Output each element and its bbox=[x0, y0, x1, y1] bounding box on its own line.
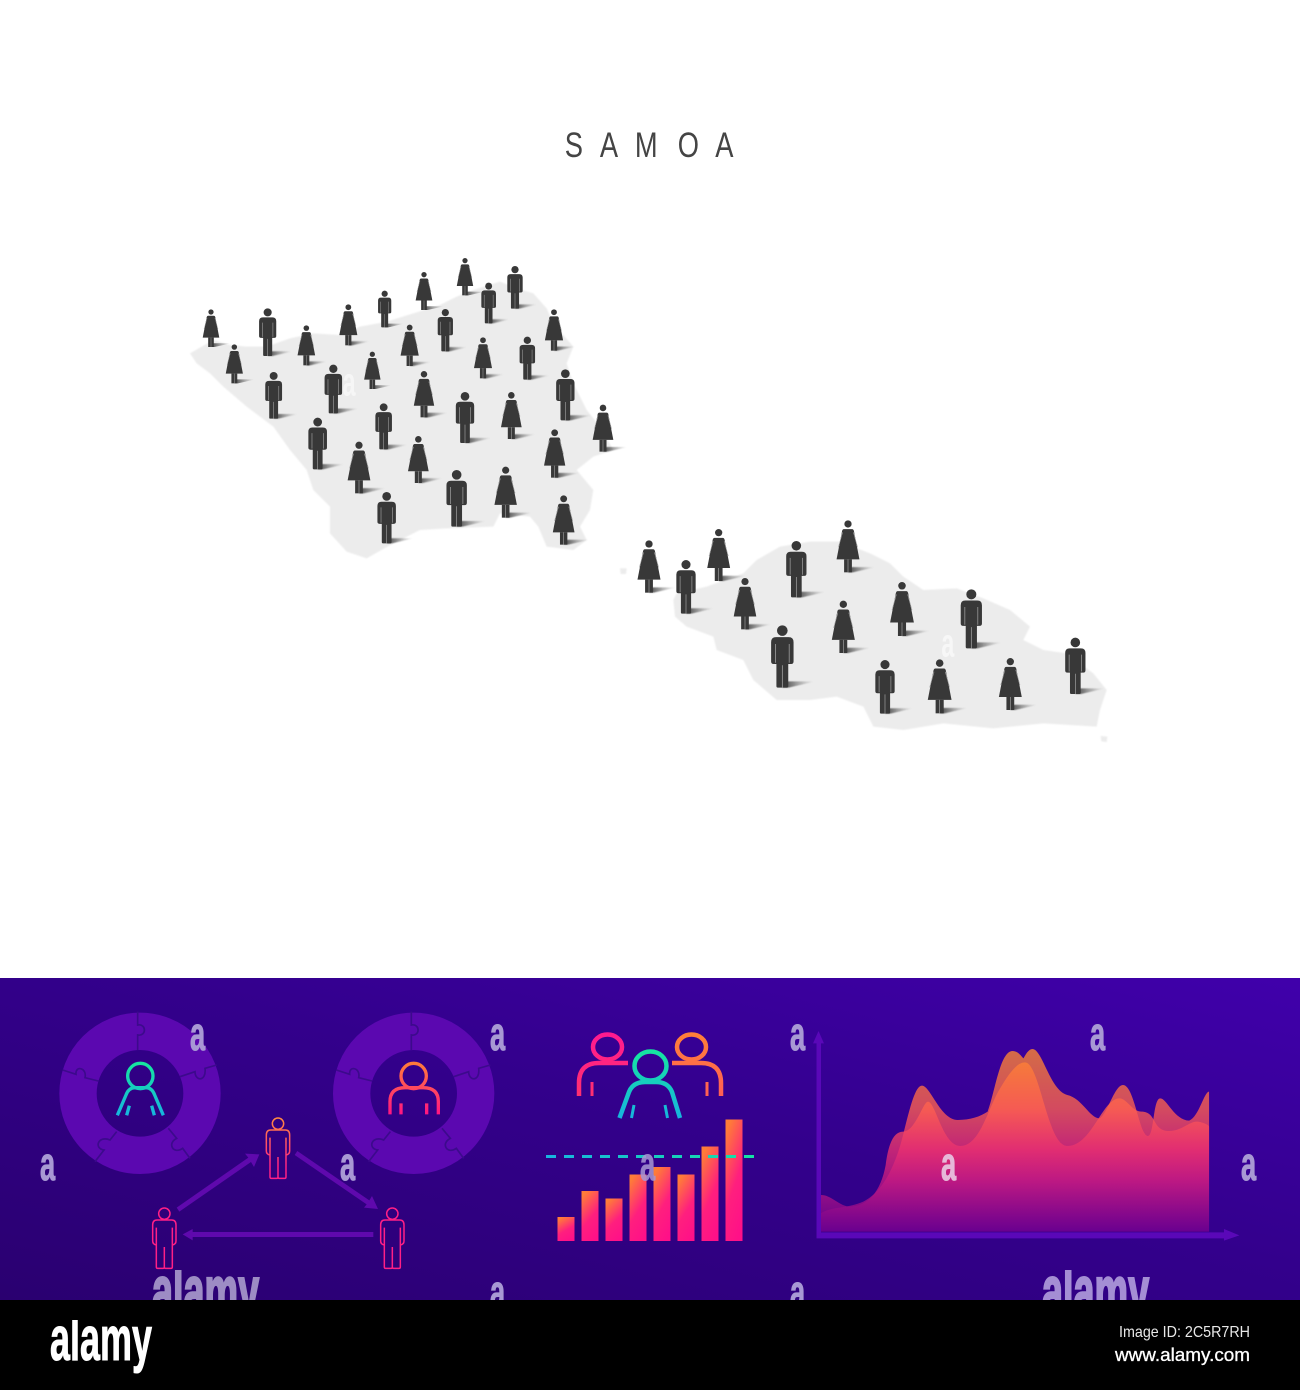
person bbox=[494, 467, 533, 518]
person bbox=[553, 495, 590, 545]
person bbox=[507, 266, 538, 309]
person bbox=[364, 352, 392, 389]
person bbox=[786, 541, 827, 597]
area chart bbox=[813, 1031, 1239, 1241]
watermark: alamy left: alamy bbox=[152, 1252, 259, 1330]
watermark on land: a bbox=[941, 620, 955, 665]
person bbox=[298, 325, 328, 365]
person bbox=[875, 660, 914, 714]
person bbox=[377, 492, 414, 543]
person bbox=[401, 325, 432, 366]
person bbox=[707, 529, 747, 581]
watermarks on panel: a bbox=[941, 1138, 957, 1191]
person bbox=[593, 405, 628, 452]
person bbox=[544, 429, 581, 478]
dashed threshold line bbox=[546, 1155, 754, 1158]
person bbox=[1065, 638, 1106, 694]
orange person bbox=[672, 1034, 721, 1096]
person bbox=[308, 418, 346, 469]
area layer front bbox=[821, 1049, 1209, 1232]
watermark: alamy right: alamy bbox=[1042, 1252, 1149, 1330]
pink person bbox=[579, 1034, 628, 1096]
arrow: left to top bbox=[177, 1154, 259, 1212]
watermarks on panel: a bbox=[790, 1008, 806, 1061]
area layer back bbox=[821, 1062, 1209, 1232]
person bbox=[734, 578, 773, 629]
person bbox=[501, 392, 537, 439]
footer logo: alamy bbox=[50, 1304, 152, 1373]
arrow: right to left bbox=[183, 1229, 373, 1240]
footer bar bbox=[0, 1300, 1300, 1390]
person bbox=[378, 291, 404, 327]
watermarks on panel bbox=[40, 1008, 1257, 1319]
puzzle donut right bbox=[336, 1012, 490, 1162]
person bbox=[457, 258, 485, 295]
watermarks on panel: a bbox=[340, 1138, 356, 1191]
person bbox=[832, 601, 872, 653]
icon: group of three people bbox=[579, 1034, 721, 1118]
person bbox=[375, 403, 409, 449]
puzzle donut left bbox=[63, 1012, 217, 1162]
person bbox=[474, 337, 505, 378]
person bbox=[890, 582, 931, 636]
island land shape bbox=[190, 282, 613, 558]
watermarks on panel: a bbox=[490, 1266, 506, 1319]
person bbox=[637, 540, 677, 593]
person bbox=[339, 304, 370, 345]
person bbox=[414, 371, 449, 417]
watermarks on panel: a bbox=[1090, 1008, 1106, 1061]
map: eastern island Upolu bbox=[620, 520, 1107, 742]
person bbox=[481, 283, 511, 323]
person bbox=[456, 392, 493, 443]
person bbox=[408, 436, 444, 483]
image id: Image ID: 2C5R7RH bbox=[1119, 1324, 1250, 1341]
island land shape bbox=[620, 542, 1107, 742]
person bbox=[999, 658, 1038, 710]
person bbox=[203, 309, 231, 347]
panel: left diagrams bbox=[63, 1012, 490, 1268]
watermarks on panel: a bbox=[190, 1008, 206, 1061]
panel: purple infographics band bbox=[0, 978, 1300, 1300]
watermark on land: a bbox=[343, 359, 356, 404]
arrow: top to right bbox=[295, 1151, 378, 1209]
watermarks on panel: a bbox=[1241, 1138, 1257, 1191]
person bbox=[325, 365, 360, 413]
person bbox=[961, 589, 1003, 648]
person bbox=[545, 309, 576, 351]
person bbox=[259, 308, 293, 356]
watermarks on panel: a bbox=[640, 1138, 656, 1191]
watermarks on panel: a bbox=[40, 1138, 56, 1191]
watermarks on panel: a bbox=[790, 1266, 806, 1319]
title: SAMOA bbox=[565, 126, 734, 165]
person bbox=[556, 369, 593, 420]
icon: outlined person top bbox=[266, 1118, 290, 1178]
person bbox=[771, 625, 816, 688]
icon: teal person bbox=[117, 1063, 163, 1115]
person bbox=[676, 560, 715, 614]
icon: orange person bbox=[390, 1063, 438, 1114]
person bbox=[837, 520, 876, 572]
website: www.alamy.com bbox=[1114, 1345, 1250, 1365]
icon: outlined person left bbox=[153, 1208, 176, 1268]
person bbox=[226, 344, 255, 383]
person bbox=[348, 442, 387, 493]
axes with arrows bbox=[813, 1031, 1239, 1241]
bar chart bbox=[558, 1120, 742, 1241]
person bbox=[520, 337, 551, 380]
person bbox=[928, 659, 969, 713]
person bbox=[265, 372, 299, 419]
person bbox=[416, 272, 445, 310]
map: western island Savai'i bbox=[190, 258, 628, 558]
teal person bbox=[620, 1052, 680, 1118]
person bbox=[446, 470, 487, 527]
watermarks on panel: a bbox=[490, 1008, 506, 1061]
person bbox=[438, 309, 468, 351]
icon: outlined person right bbox=[381, 1208, 404, 1268]
